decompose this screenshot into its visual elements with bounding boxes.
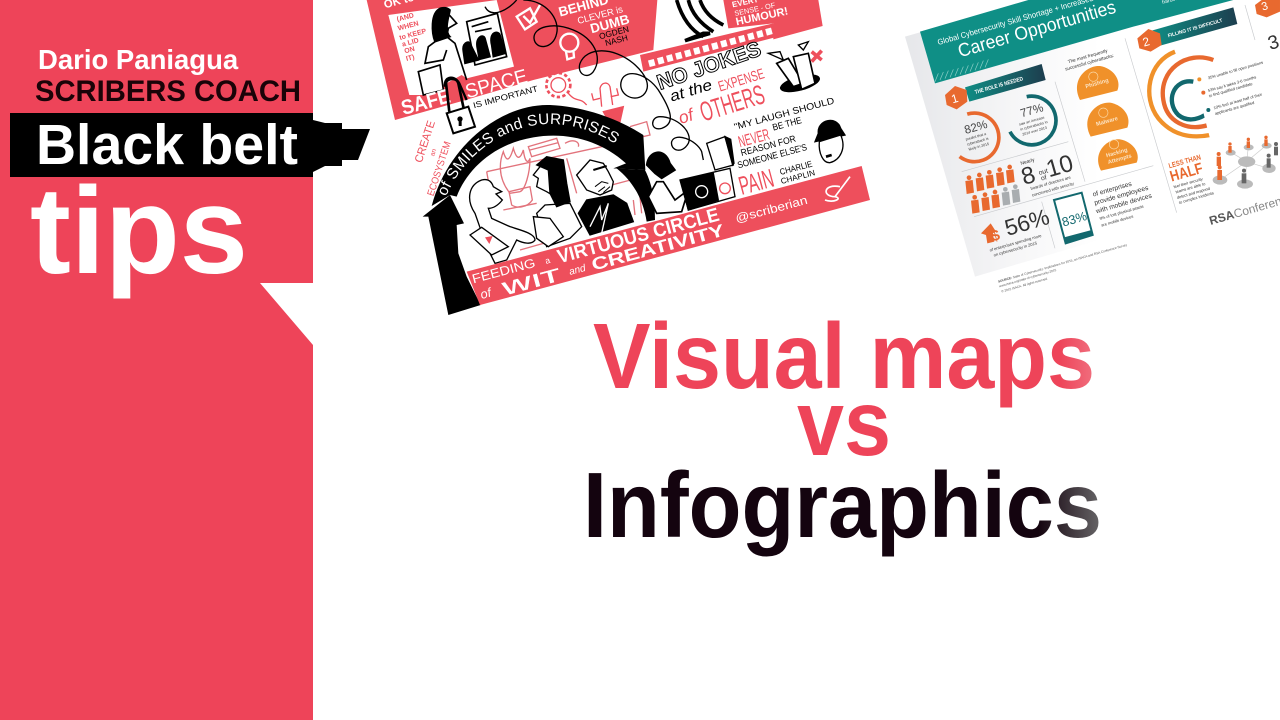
- text: feeding a virtuous circle: VIRTUOUS CIRCLE: [555, 205, 722, 268]
- stat: 83 percent phone: are mobile devices: [1101, 214, 1134, 228]
- stat: 56 percent: of enterprises spending more: [989, 233, 1043, 253]
- text: safe space: SAFE: [399, 85, 453, 120]
- ring: 77 percent: in cyberattacks in: [1020, 120, 1048, 132]
- stat: 83 percent phone: with mobile devices: [1094, 192, 1153, 216]
- stat: 83 percent phone: provide employees: [1094, 185, 1150, 207]
- quote: behind clever is dumb: DUMB: [589, 11, 631, 36]
- stat: less than half: detect and respond: [1176, 186, 1210, 200]
- text: feeding a virtuous circle: WIT: [500, 265, 564, 301]
- section 1 banner: [945, 64, 1046, 109]
- stat: 56 percent: on cybersecurity in 2015: [993, 240, 1038, 258]
- attack: hacking attempts: Hacking: [1106, 147, 1129, 159]
- attack: malware: [1087, 103, 1128, 137]
- section 1 banner: THE ROLE IS NEEDED: [974, 76, 1024, 96]
- network diagram: [1213, 136, 1278, 189]
- squiggle line: [485, 0, 703, 160]
- infographic illustration: [905, 0, 1280, 294]
- black arrow up: [423, 195, 481, 315]
- black arc right: [617, 168, 655, 222]
- stat: less than half: [1167, 152, 1214, 205]
- text: create an ecosystem: CREATE: [413, 119, 438, 164]
- attacks heading: The most frequently: [1067, 48, 1109, 64]
- text: safe space: SPACE: [463, 66, 530, 103]
- white legend overlay: [1195, 55, 1280, 145]
- ring: 82 percent: cyberattack is: [967, 137, 989, 147]
- background red line art: [487, 122, 650, 250]
- section 2 banner: 2: [1141, 34, 1152, 50]
- ring: 82 percent: predict that a: [965, 132, 988, 142]
- text: scriberian handle: @scriberian: [734, 193, 809, 226]
- icon: signature: [825, 177, 850, 201]
- stat: less than half: teams are able to: [1175, 181, 1207, 194]
- ring chart legend: to find qualified candidate: [1208, 81, 1254, 98]
- quote: my laugh should never be the reason: CHAPLIN: [780, 168, 816, 186]
- black arch banner: of smiles and surprises: of SMILES and SURPRISES: [440, 113, 619, 195]
- header hatching: [935, 59, 988, 82]
- person: man with lightning t-shirt: [577, 160, 633, 235]
- text: and when to keep a lid on it: WHEN: [397, 20, 419, 33]
- quote: my laugh should never be the reason: "MY LAUGH SHOULD: [733, 95, 836, 132]
- teal header band: [920, 0, 1233, 83]
- stat: less than half: to complex incidents: [1178, 190, 1214, 205]
- icon: crossed out microphone: [768, 42, 822, 96]
- red band top right: [723, 0, 823, 39]
- panel: bottom red band: [467, 166, 870, 305]
- text: expense of others: EXPENSE: [716, 66, 767, 95]
- text: at the: at the: [668, 77, 714, 105]
- source note: © 2015 ISACA. All rights reserved.: [1001, 276, 1048, 294]
- stat: 83 percent phone: 83%: [1060, 209, 1089, 230]
- author role: SCRIBERS COACH: [35, 75, 301, 108]
- stat: 8 out of 10: 10: [1043, 150, 1076, 183]
- text: feeding a virtuous circle: and: [568, 263, 587, 278]
- attribution: ogden nash: NASH: [604, 32, 629, 48]
- ring chart legend: 35% unable to fill open positions: [1207, 60, 1264, 80]
- machine: printer: [680, 137, 735, 210]
- stat: 56 percent: [981, 203, 1052, 258]
- stat: less than half: HALF: [1168, 160, 1205, 186]
- presenter and audience figure: [418, 8, 507, 100]
- ring: 82 percent: 82%: [963, 118, 989, 137]
- ring chart legend: [1197, 60, 1264, 116]
- stat: 8 out of 10: out: [1038, 168, 1049, 177]
- text: feeding a virtuous circle: a: [544, 255, 551, 266]
- text: expense of others: [676, 66, 768, 128]
- text: create an ecosystem: an: [429, 148, 438, 157]
- heading: tips: tips: [30, 163, 248, 300]
- note panel: [388, 0, 514, 95]
- ring chart legend: 53% say it takes 3-6 months: [1207, 74, 1257, 93]
- stat: 8 out of 10: concerned with security: [1031, 181, 1075, 198]
- text: create an ecosystem: [413, 119, 454, 198]
- text: is important: IS IMPORTANT: [472, 83, 539, 110]
- ring: 77 percent: saw an increase: [1019, 115, 1045, 127]
- text: expense of others: of: [676, 104, 698, 128]
- stat: 56 percent: 56%: [1002, 203, 1052, 241]
- ring: 77 percent: 2014 over 2013: [1022, 126, 1047, 137]
- quote: my laugh should never be the reason: SOMEONE ELSE'S: [736, 142, 808, 170]
- panel: red sidebar: [0, 0, 313, 720]
- quote: behind clever is dumb: CLEVER is: [576, 4, 624, 26]
- title: Infographics: Infographics: [583, 453, 1102, 557]
- text: sense of humour: HUMOUR!: [735, 5, 789, 28]
- attack: hacking attempts: [1098, 139, 1138, 171]
- person: woman with tablet: [470, 180, 535, 263]
- text: create an ecosystem: ECOSYSTEM: [426, 140, 454, 198]
- attack: hacking attempts: Attempts: [1107, 153, 1132, 166]
- heading: Black belt: Black belt: [36, 113, 298, 177]
- stat: 8 out of 10: of: [1040, 174, 1048, 183]
- title: vs: vs: [797, 371, 891, 475]
- text: and when to keep a lid on it: ON: [404, 46, 416, 55]
- text: and when to keep a lid on it: to KEEP: [399, 28, 427, 42]
- stat: 56 percent: $: [989, 227, 1002, 246]
- people pictogram: [965, 165, 1020, 214]
- quote: my laugh should never be the reason: [733, 95, 836, 201]
- striped figure: [677, 0, 723, 41]
- text: and when to keep a lid on it: (AND: [396, 12, 415, 24]
- text: sense of humour: SENSE - OF: [734, 0, 777, 18]
- quote: my laugh should never be the reason: REASON FOR: [740, 134, 797, 158]
- quote: my laugh should never be the reason: BE THE: [771, 115, 803, 133]
- icon: check box: [517, 5, 540, 29]
- ring chart legend: applicants are qualified: [1214, 100, 1255, 116]
- visual map illustration: [366, 0, 870, 315]
- stat: 8 out of 10: 8: [1018, 161, 1038, 191]
- section 3 badge: [1255, 0, 1280, 55]
- icon: charlie chaplin: [815, 120, 845, 163]
- text: feeding a virtuous circle: FEEDING: [470, 256, 537, 286]
- stat: 8 out of 10: boards of directors are: [1030, 175, 1072, 191]
- source note: SOURCE: State of Cybersecurity: Implications for 2015, an ISACA and RSA Conference Survey: [998, 243, 1128, 284]
- ring chart legend: 10% feel at least half of their: [1213, 91, 1263, 110]
- top red block: [367, 0, 657, 120]
- attack: phishing: Phishing: [1085, 78, 1110, 90]
- text: safe space: [399, 66, 530, 120]
- text: feeding a virtuous circle: CREATIVITY: [589, 220, 727, 275]
- text: and when to keep a lid on it: [396, 12, 427, 63]
- text: feeding a virtuous circle: of: [479, 285, 494, 302]
- ring: 82 percent: likely in 2015: [968, 142, 990, 152]
- author name: Dario Paniagua: [38, 44, 239, 75]
- divider lines: [962, 5, 1255, 248]
- text: and when to keep a lid on it: a LID: [401, 37, 420, 49]
- title: Visual maps: Visual maps: [593, 304, 1095, 408]
- stat: 83 percent phone: [1054, 181, 1153, 243]
- attack: phishing: [1077, 66, 1118, 100]
- film strip band: [640, 23, 775, 72]
- attribution: ogden nash: OGDEN: [598, 24, 630, 41]
- text: expense of others: OTHERS: [696, 78, 768, 127]
- infographic paper: [905, 0, 1280, 277]
- concentric ring chart: [1149, 52, 1213, 136]
- person: woman at printer: [647, 152, 688, 213]
- quote: my laugh should never be the reason: CHARLIE: [779, 159, 814, 177]
- quote: behind clever is dumb: [557, 0, 631, 36]
- person: woman with book: [533, 157, 582, 247]
- stat: 8 out of 10: [1018, 150, 1076, 198]
- ring: 77 percent: 77%: [1019, 101, 1045, 120]
- text: feeding a virtuous circle: [470, 205, 727, 302]
- stat: 83 percent phone: of enterprises: [1092, 181, 1133, 199]
- section 2 banner: FILLING IT IS DIFFICULT: [1167, 18, 1223, 39]
- ring: 77 percent: [1010, 96, 1056, 145]
- icon: padlock: [446, 79, 475, 133]
- stat: 8 out of 10: Nearly: [1020, 157, 1036, 167]
- black marker banner: [10, 113, 370, 177]
- text: and when to keep a lid on it: IT): [405, 54, 415, 63]
- stat: less than half: LESS THAN: [1167, 152, 1202, 170]
- text: no jokes: NO JOKES: [654, 37, 764, 95]
- attack: malware: Malware: [1096, 116, 1119, 128]
- section 2 banner: [1137, 7, 1237, 52]
- stat: 83 percent phone: 9% of lost physical assets: [1099, 204, 1144, 221]
- ring: 82 percent: [949, 108, 1004, 166]
- attacks heading: successful cyberattacks:: [1065, 53, 1114, 72]
- icon: flower and cactus: [546, 73, 623, 124]
- quote: my laugh should never be the reason: PAIN: [735, 163, 777, 201]
- quote: my laugh should never be the reason: NEVER: [737, 127, 772, 151]
- section 1 banner: 1: [950, 91, 960, 106]
- icon: light bulb: [560, 34, 578, 59]
- stat: less than half: feel their security: [1173, 176, 1203, 189]
- source note: www.isaca.org/state-of-cybersecurity-2015: [999, 268, 1057, 288]
- section 3 badge: 3: [1260, 0, 1270, 14]
